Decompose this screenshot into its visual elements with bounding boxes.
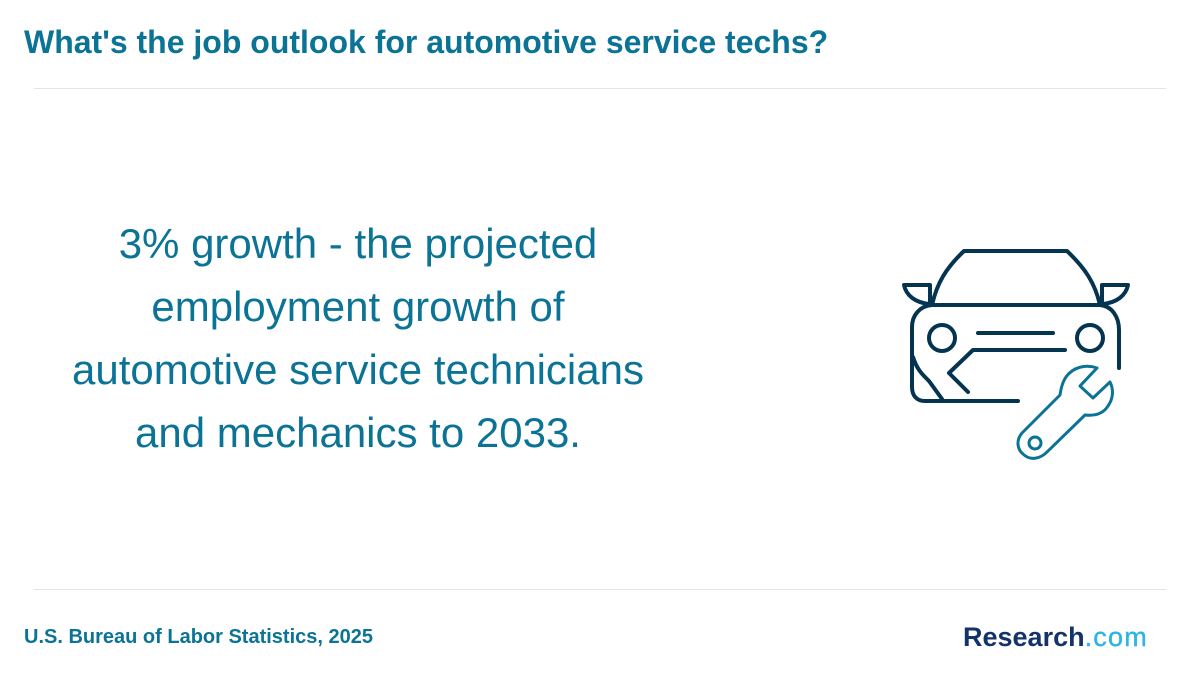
main statistic text: and mechanics to 2033. [135,409,581,456]
main statistic text: automotive service technicians [72,346,644,393]
main statistic text [72,220,644,456]
title: What's the job outlook for automotive service techs? [24,24,828,60]
main statistic text: employment growth of [151,283,565,330]
icon: car with wrench [902,249,1130,460]
icon: wrench [1018,366,1112,458]
icon: car [904,251,1128,401]
logo: Research.com: Research.com [963,622,1148,652]
source note: U.S. Bureau of Labor Statistics, 2025 [24,626,373,648]
main statistic text: 3% growth - the projected [119,220,597,267]
